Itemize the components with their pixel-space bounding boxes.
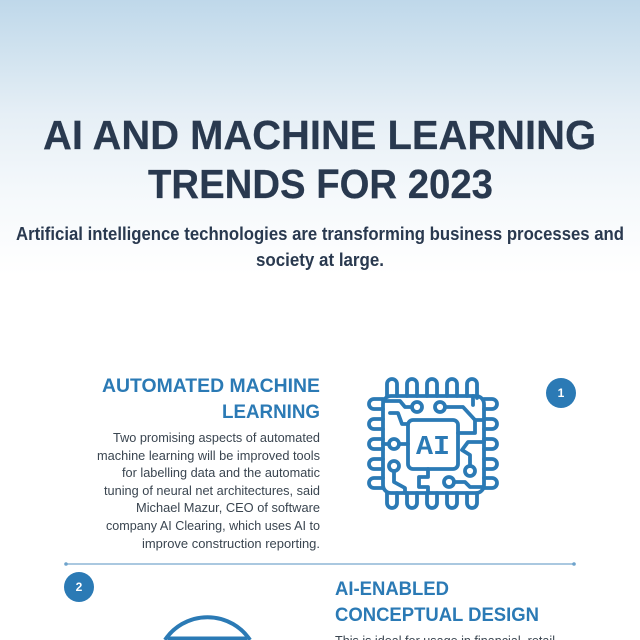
number badge 2 <box>64 572 94 602</box>
heading: AI-enabled conceptual design: CONCEPTUAL DESIGN <box>335 605 539 626</box>
title: AI AND MACHINE LEARNING <box>43 112 596 158</box>
heading: automated machine learning: AUTOMATED MACHINE <box>102 376 320 397</box>
text block: automated machine learning: company AI Clearing, which uses AI to <box>106 519 320 533</box>
icon: partial globe <box>165 617 250 640</box>
panel: AI-enabled conceptual design <box>64 572 555 640</box>
text block: automated machine learning: machine learning will be improved tools <box>97 449 320 463</box>
heading: AI-enabled conceptual design: AI-ENABLED <box>335 579 449 600</box>
number badge 1: 1 <box>558 386 565 400</box>
heading: AI-enabled conceptual design <box>335 579 539 626</box>
text block: automated machine learning: for labelling data and the automatic <box>122 466 320 480</box>
subtitle <box>16 224 624 270</box>
heading: automated machine learning: LEARNING <box>222 402 320 423</box>
number badge 1 <box>546 378 576 408</box>
icon label: AI: AI <box>416 433 450 463</box>
heading: automated machine learning <box>102 376 320 423</box>
panel: automated machine learning <box>97 376 576 551</box>
text block: automated machine learning: Two promising aspects of automated <box>113 431 320 445</box>
text block: automated machine learning: Michael Mazur, CEO of software <box>136 501 320 515</box>
divider line <box>64 562 576 566</box>
title <box>43 112 596 207</box>
subtitle: society at large. <box>256 250 384 270</box>
text block: automated machine learning <box>97 431 320 551</box>
icon: AI chip <box>369 379 497 508</box>
title: TRENDS FOR 2023 <box>148 161 493 207</box>
text block: automated machine learning: improve construction reporting. <box>142 537 320 551</box>
number badge 2: 2 <box>76 580 83 594</box>
text block: automated machine learning: tuning of neural net architectures, said <box>104 484 320 498</box>
